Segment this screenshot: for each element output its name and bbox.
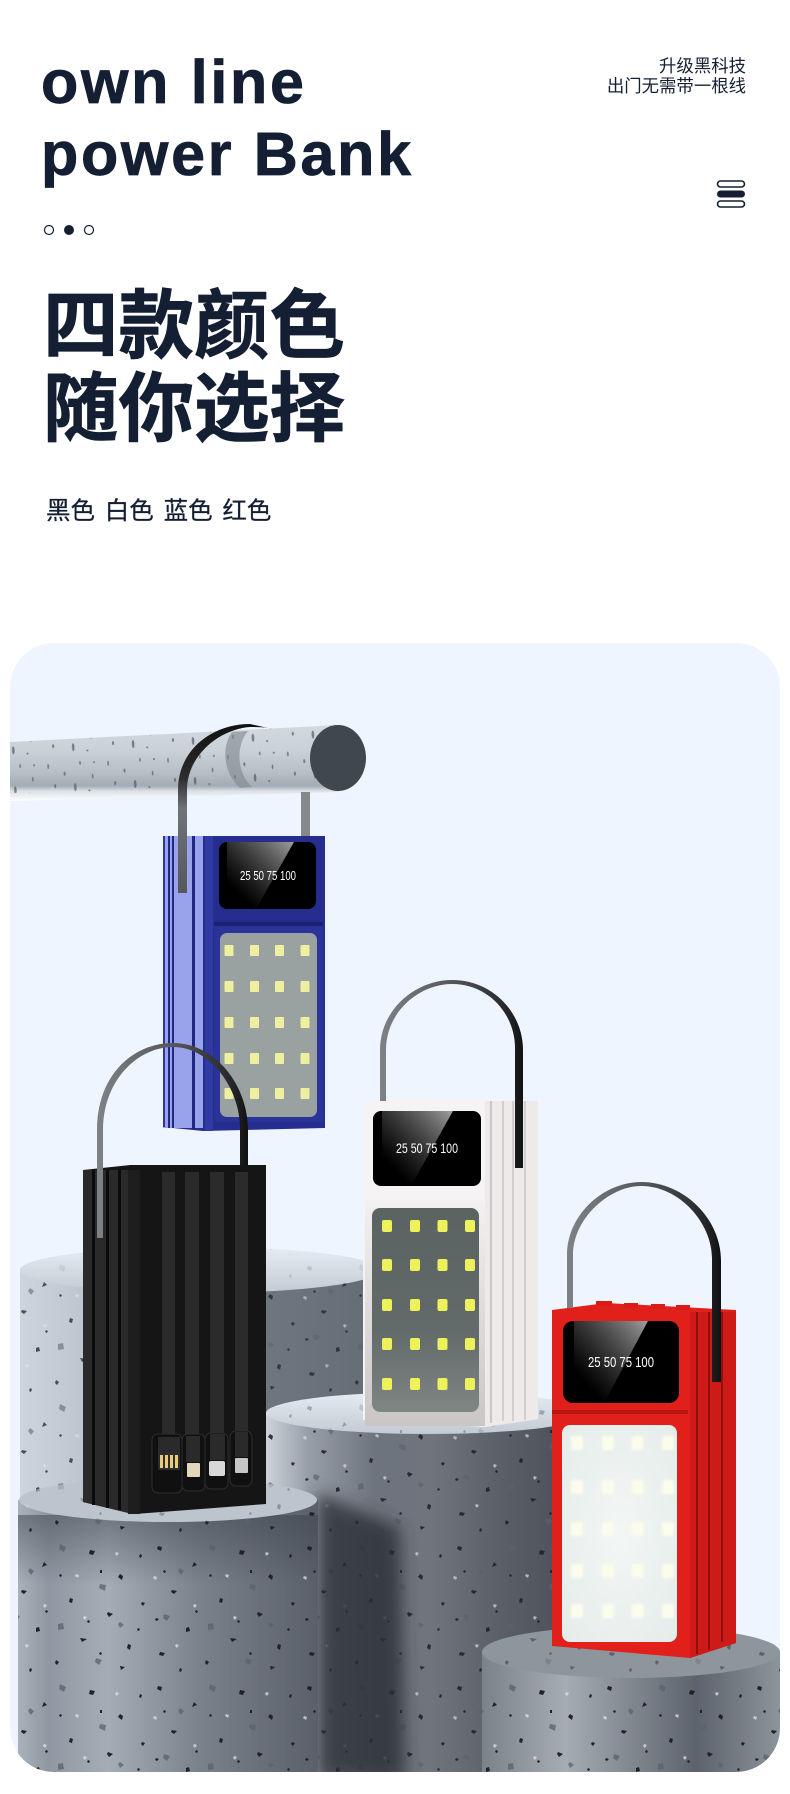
black handle xyxy=(97,1043,248,1238)
text: top-right tagline xyxy=(607,56,746,96)
white lamp panel xyxy=(372,1208,479,1412)
red screen xyxy=(563,1321,679,1403)
heading: four colours xyxy=(43,284,345,450)
text: colour list: 黑色 白色 蓝色 红色 xyxy=(46,498,271,525)
pipe xyxy=(10,725,366,801)
blue screen xyxy=(219,842,316,909)
heading: four colours: 随你选择 xyxy=(43,366,345,450)
black connectors xyxy=(152,1431,252,1493)
pedestal: front left xyxy=(18,1478,318,1780)
white handle xyxy=(380,980,523,1168)
icon: menu xyxy=(716,180,746,208)
pipe end cap xyxy=(310,725,366,791)
power bank: white xyxy=(363,1098,538,1427)
blue handle xyxy=(178,724,268,893)
panel: product scene xyxy=(10,643,780,1772)
red lamp panel xyxy=(562,1425,677,1642)
pedestal: back left xyxy=(20,1247,380,1770)
title: own line power Bank xyxy=(41,48,414,188)
power bank: blue xyxy=(163,836,325,1131)
heading: four colours: 四款颜色 xyxy=(43,284,345,368)
blue strap rear xyxy=(301,792,310,836)
power bank: black xyxy=(83,1165,266,1514)
text: top-right tagline: 升级黑科技 xyxy=(659,56,746,76)
pedestal: front right xyxy=(482,1626,782,1782)
power bank: red xyxy=(552,1301,736,1658)
pagination dots xyxy=(44,224,94,236)
red screen: 25 50 75 100 xyxy=(588,1354,654,1371)
title: own line power Bank: power Bank xyxy=(41,120,414,188)
title: own line power Bank: own line xyxy=(41,48,307,116)
black cable channels xyxy=(162,1172,248,1434)
blue screen: 25 50 75 100 xyxy=(240,868,296,883)
pedestal: middle xyxy=(266,1394,552,1772)
red handle xyxy=(567,1182,721,1382)
white screen xyxy=(373,1111,481,1186)
blue lamp panel xyxy=(220,933,317,1117)
panel background xyxy=(10,643,780,1772)
text: top-right tagline: 出门无需带一根线 xyxy=(607,76,746,96)
white screen: 25 50 75 100 xyxy=(396,1140,458,1156)
